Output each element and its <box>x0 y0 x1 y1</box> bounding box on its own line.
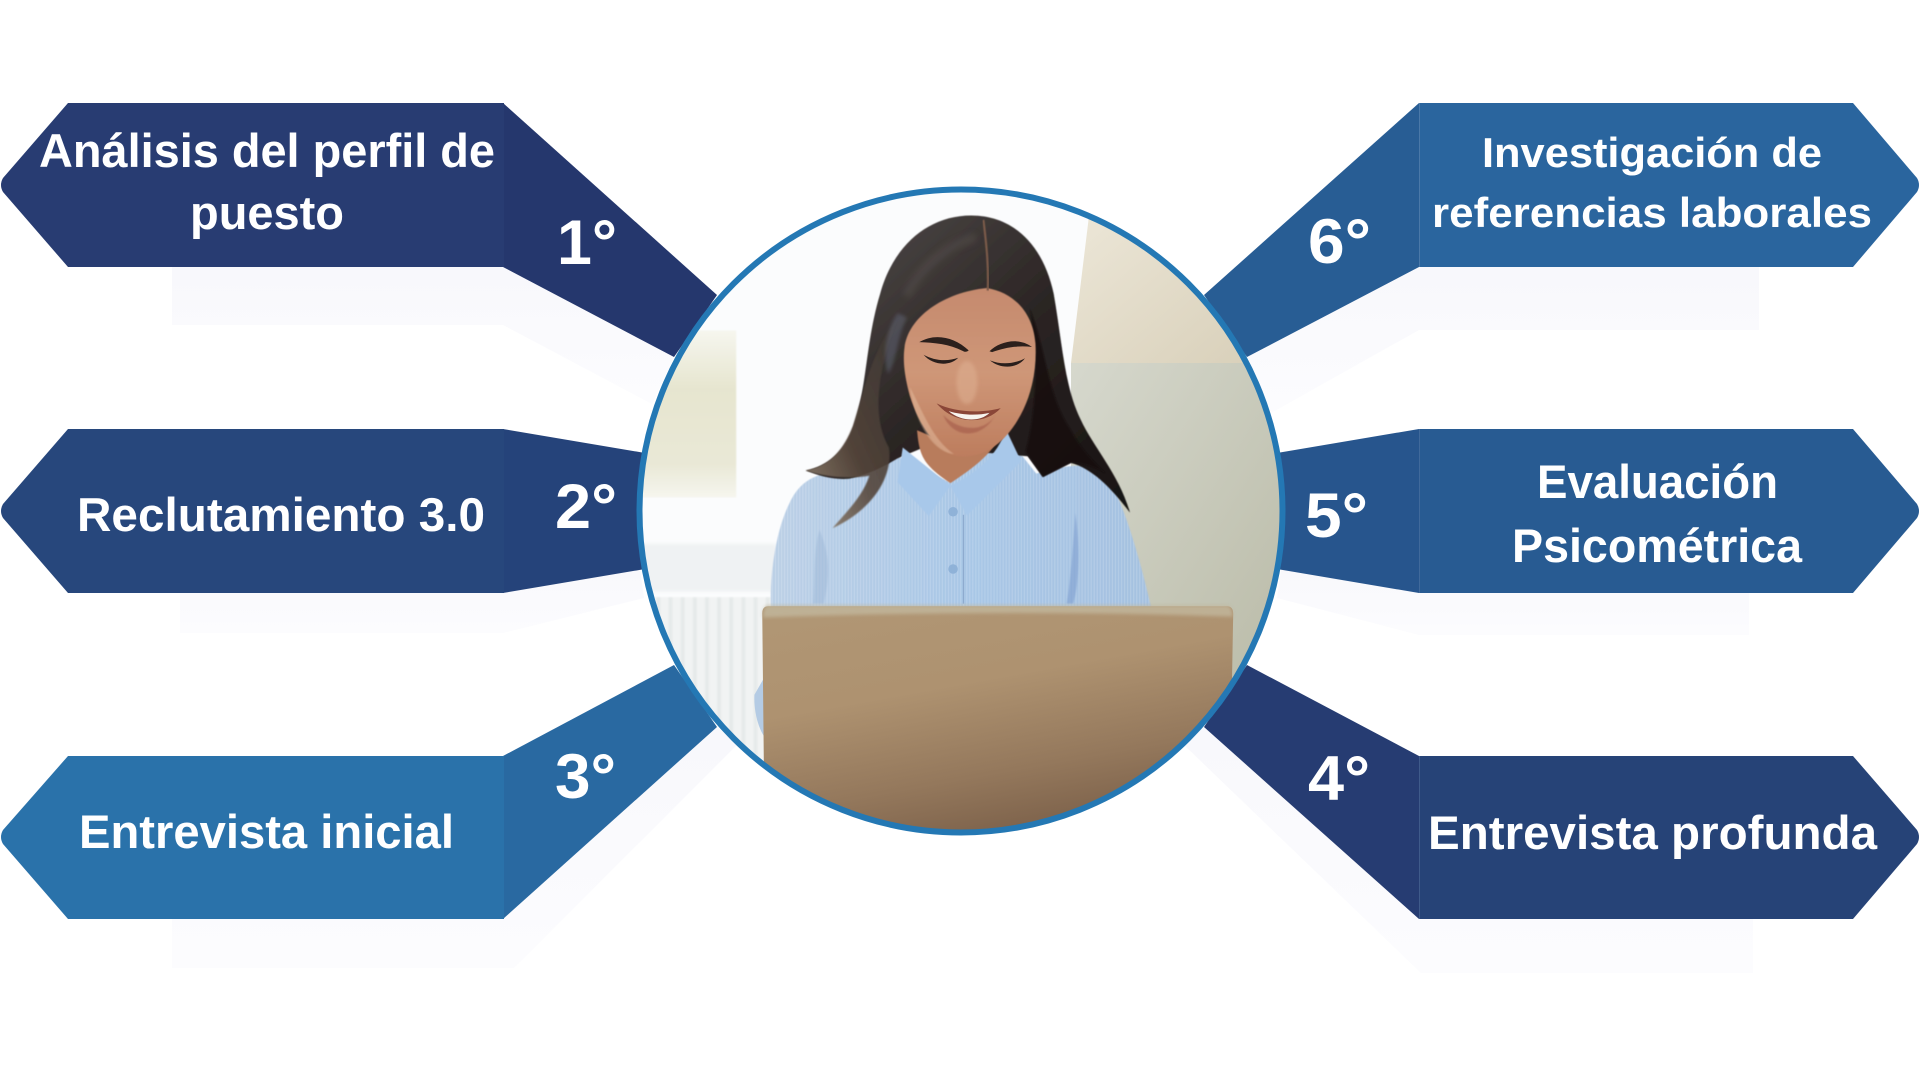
banner 6: Investigación de referencias laborales <box>1204 103 1919 357</box>
label: Análisis del perfil de <box>39 124 495 177</box>
wall upper <box>1071 219 1243 363</box>
label: Evaluación <box>1537 455 1778 508</box>
step number 1: 1° <box>557 208 617 278</box>
photo ring <box>640 190 1282 832</box>
sleeve shading <box>1067 513 1078 604</box>
wall lower <box>1071 363 1280 678</box>
central photo: woman at laptop <box>642 214 1280 830</box>
soft shadows under banners <box>172 267 1759 973</box>
radiator <box>655 597 770 760</box>
hair parting <box>983 220 988 291</box>
banner 2: Reclutamiento 3.0 <box>1 429 645 593</box>
step number 2: 2° <box>555 472 617 542</box>
infographic <box>1 103 1919 919</box>
small sleeve left of laptop <box>754 680 764 736</box>
window sill <box>637 544 776 592</box>
step number 6: 6° <box>1308 207 1371 277</box>
laptop top edge <box>763 605 1233 618</box>
dark hair right <box>1026 312 1096 478</box>
step number 5: 5° <box>1305 481 1368 551</box>
step number 4: 4° <box>1308 744 1370 814</box>
banner 5: Evaluación Psicométrica <box>1277 429 1919 593</box>
nose highlight <box>957 361 977 404</box>
shirt <box>770 452 1151 606</box>
eyes <box>924 355 1025 367</box>
banner 1: Análisis del perfil de puesto: puesto <box>190 186 344 239</box>
hair <box>806 216 1130 513</box>
banner 6: Investigación de referencias laborales: referencias laborales <box>1432 189 1872 236</box>
banner 5: Evaluación Psicométrica: Psicométrica <box>1512 519 1803 572</box>
label: Entrevista profunda <box>1428 806 1878 859</box>
hair highlight <box>885 313 907 374</box>
label: Reclutamiento 3.0 <box>77 488 485 541</box>
neck <box>916 430 995 484</box>
window left <box>637 330 736 497</box>
left hair lock <box>806 342 890 528</box>
face <box>904 288 1036 456</box>
banner 1: Análisis del perfil de puesto <box>1 103 717 357</box>
laptop <box>762 606 1233 850</box>
cheek shading <box>910 387 954 454</box>
step number 3: 3° <box>555 742 616 812</box>
label: Investigación de <box>1482 129 1822 176</box>
placket and buttons <box>948 507 963 604</box>
banner 3: Entrevista inicial <box>1 665 717 919</box>
collar <box>898 429 1021 516</box>
smile <box>937 403 1001 420</box>
banner 4: Entrevista profunda <box>1204 665 1919 919</box>
eyebrows <box>919 337 1032 352</box>
lips <box>944 416 992 434</box>
label: Entrevista inicial <box>79 805 454 858</box>
